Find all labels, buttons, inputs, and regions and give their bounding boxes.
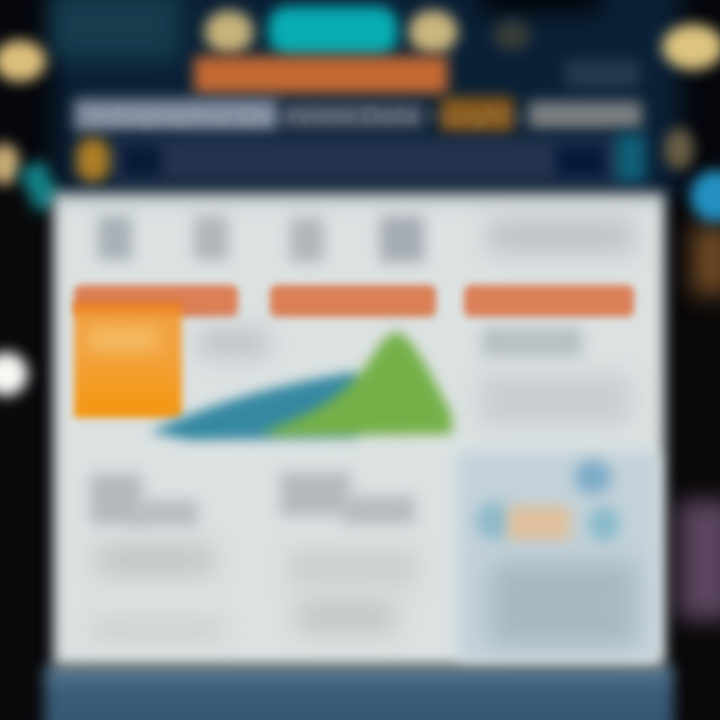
blue node left (476, 502, 512, 540)
text block right (488, 218, 634, 254)
body text (96, 544, 214, 576)
orange header 1 (74, 285, 238, 317)
orange node (508, 506, 570, 540)
decorative bokeh: dim blue bar (565, 60, 640, 88)
header bars (68, 279, 640, 323)
decorative bokeh: dim light (493, 20, 531, 50)
bottom-left text panel (84, 468, 218, 642)
decorative bokeh: gold light lower left (0, 143, 20, 185)
orange stat card (74, 302, 182, 418)
right edge amber glow (692, 225, 720, 295)
title: last word (528, 101, 642, 129)
text block (490, 562, 636, 646)
background: right dark column (674, 200, 720, 720)
icon column 2 (194, 216, 228, 260)
right top text block (476, 322, 633, 428)
subtitle dark end right (556, 145, 606, 177)
decorative bokeh: gold light top right (408, 10, 458, 54)
orange header 2 (270, 285, 436, 317)
left edge light glow (0, 352, 28, 396)
title: second word (282, 103, 424, 129)
right edge purple glow (678, 500, 720, 620)
blue node top (574, 460, 612, 494)
orange header 3 (464, 285, 634, 317)
stat number (88, 326, 158, 352)
icon column 4 (380, 216, 424, 262)
icon column 1 (98, 216, 132, 260)
heading block (90, 474, 142, 524)
body text lower (296, 600, 396, 634)
subtitle dark end left (120, 145, 162, 177)
panel fill (458, 452, 658, 660)
decorative bokeh: gold light far right (662, 24, 720, 70)
background: dark teal patch top left (50, 0, 180, 60)
body lines (480, 375, 630, 425)
teal corner accent left (18, 159, 62, 213)
heading block (280, 472, 350, 516)
heading block second line (132, 500, 198, 526)
gold bullet (76, 138, 110, 182)
teal pill badge (268, 6, 398, 56)
area chart (147, 324, 461, 450)
icon column 3 (290, 218, 324, 262)
area: teal (150, 372, 380, 440)
heading lines (482, 327, 582, 357)
area: green peak (260, 332, 452, 436)
decorative bokeh: dim gold right (664, 128, 694, 170)
bottom-right blue panel (454, 448, 668, 669)
bottom-middle text panel (274, 466, 421, 640)
orange title banner (194, 56, 448, 94)
bottom strip (44, 666, 674, 720)
top row of icons (91, 209, 640, 269)
heading block second line (343, 496, 415, 524)
title band (64, 87, 652, 140)
background: black patch top centre-right (480, 0, 600, 12)
title: highlighted word (440, 97, 514, 133)
background: dark navy glow top (55, 0, 680, 200)
main white panel (53, 192, 665, 666)
blue corner accent right (690, 170, 720, 222)
visually faint title text: Infographic Overview Data Insights (90, 100, 525, 130)
chart caption text (200, 330, 268, 356)
body text lower (92, 620, 222, 638)
decorative bokeh: gold light left (0, 40, 46, 82)
teal bullet (616, 134, 646, 182)
body text (288, 550, 418, 586)
subtitle band (112, 138, 622, 182)
background: left dark column (0, 190, 42, 720)
teal node right (588, 506, 620, 542)
title: first word (74, 99, 278, 131)
decorative bokeh: gold light top left (204, 10, 254, 54)
